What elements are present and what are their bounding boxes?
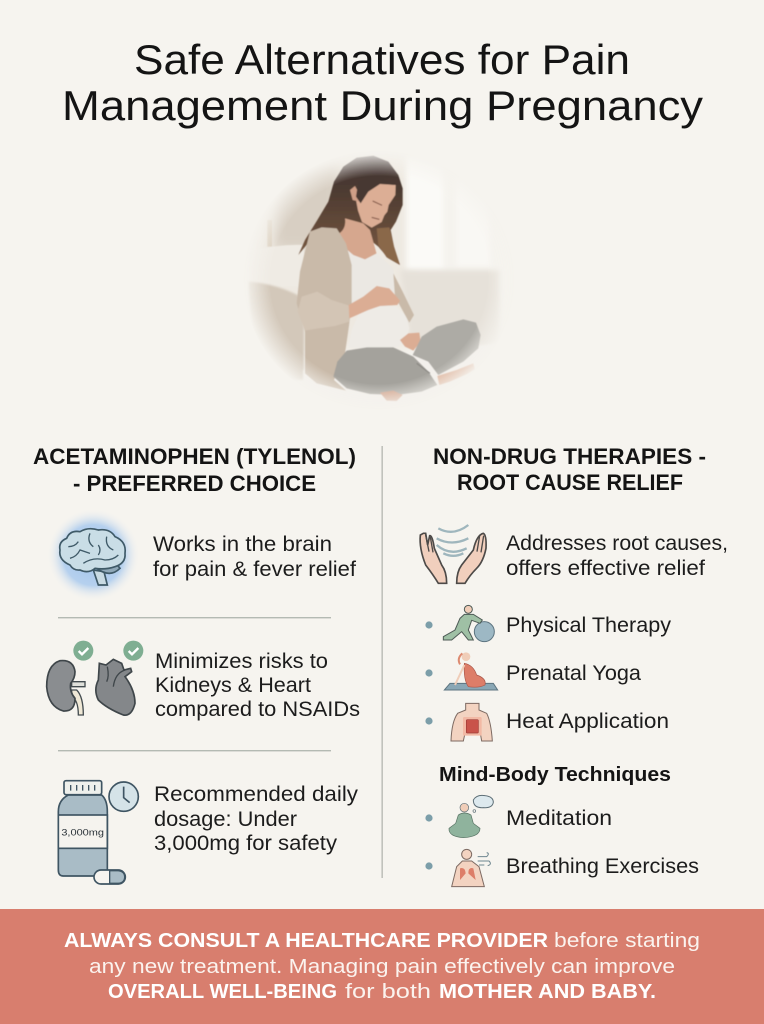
text: works in the brain: Works in the brain xyxy=(153,533,332,556)
belly xyxy=(348,307,409,349)
arm and hands xyxy=(349,286,400,318)
heading: non-drug therapies: ROOT CAUSE RELIEF xyxy=(457,470,683,495)
list item: prenatal yoga: Prenatal Yoga xyxy=(506,662,641,685)
hair xyxy=(298,156,403,265)
cardigan xyxy=(297,227,352,391)
banner: consult a healthcare provider: for both xyxy=(345,980,431,1003)
subheading: mind-body techniques: Mind-Body Techniques xyxy=(439,763,671,786)
text: addresses root causes xyxy=(506,532,728,580)
icon: brain xyxy=(47,508,140,602)
icon: medicine bottle with clock and pill: 3,000mg xyxy=(61,827,104,837)
heading: acetaminophen: - PREFERRED CHOICE xyxy=(73,471,316,496)
list item: heat application xyxy=(425,703,669,741)
text: minimizes risks: Kidneys & Heart xyxy=(155,674,311,697)
face xyxy=(356,183,396,228)
neck and chest xyxy=(337,218,377,261)
white top xyxy=(348,250,377,261)
text: minimizes risks: Minimizes risks to xyxy=(155,650,328,673)
photo: pregnant woman seated on bed xyxy=(249,155,499,402)
title xyxy=(62,36,703,129)
panel: non-drug therapies xyxy=(420,444,728,887)
icon: kidney and heart with checks xyxy=(47,641,143,715)
list item: meditation xyxy=(425,795,612,838)
title: Safe Alternatives for Pain xyxy=(134,36,630,83)
panel: acetaminophen xyxy=(33,444,360,884)
leggings xyxy=(413,319,481,375)
banner: consult a healthcare provider: before starting xyxy=(554,929,700,952)
text: recommended dosage xyxy=(154,783,359,855)
list item: breathing exercises: Breathing Exercises xyxy=(506,855,699,878)
list item: physical therapy: Physical Therapy xyxy=(506,614,671,637)
banner: consult a healthcare provider: ALWAYS CONSULT A HEALTHCARE PROVIDER xyxy=(64,929,548,952)
text: addresses root causes: Addresses root causes, xyxy=(506,532,728,555)
list item: prenatal yoga xyxy=(425,652,641,690)
heading: non-drug therapies: NON-DRUG THERAPIES - xyxy=(433,444,706,469)
text: recommended dosage: 3,000mg for safety xyxy=(154,832,338,855)
list item: breathing exercises xyxy=(425,849,699,887)
heading: non-drug therapies xyxy=(433,444,706,495)
banner: consult a healthcare provider: OVERALL WELL-BEING xyxy=(108,980,337,1003)
text: recommended dosage: Recommended daily xyxy=(154,783,359,806)
icon: medicine bottle with clock and pill xyxy=(58,781,138,884)
text: works in the brain xyxy=(153,533,356,581)
text: minimizes risks xyxy=(155,650,360,721)
icon: healing hands xyxy=(420,525,486,583)
banner: consult a healthcare provider: any new treatment. Managing pain effectively can improve xyxy=(89,955,675,978)
feet xyxy=(437,363,475,385)
heading: acetaminophen xyxy=(33,444,356,496)
text: minimizes risks: compared to NSAIDs xyxy=(155,698,360,721)
list item: heat application: Heat Application xyxy=(506,710,669,733)
text: recommended dosage: dosage: Under xyxy=(154,808,297,831)
text: works in the brain: for pain & fever relief xyxy=(153,558,356,581)
heading: acetaminophen: ACETAMINOPHEN (TYLENOL) xyxy=(33,444,356,469)
title: Management During Pregnancy xyxy=(62,82,703,129)
list item: physical therapy xyxy=(425,605,671,642)
banner: consult a healthcare provider: MOTHER AND BABY. xyxy=(439,980,656,1003)
text: addresses root causes: offers effective relief xyxy=(506,557,705,580)
banner: consult a healthcare provider xyxy=(0,909,764,1024)
list item: meditation: Meditation xyxy=(506,807,612,830)
